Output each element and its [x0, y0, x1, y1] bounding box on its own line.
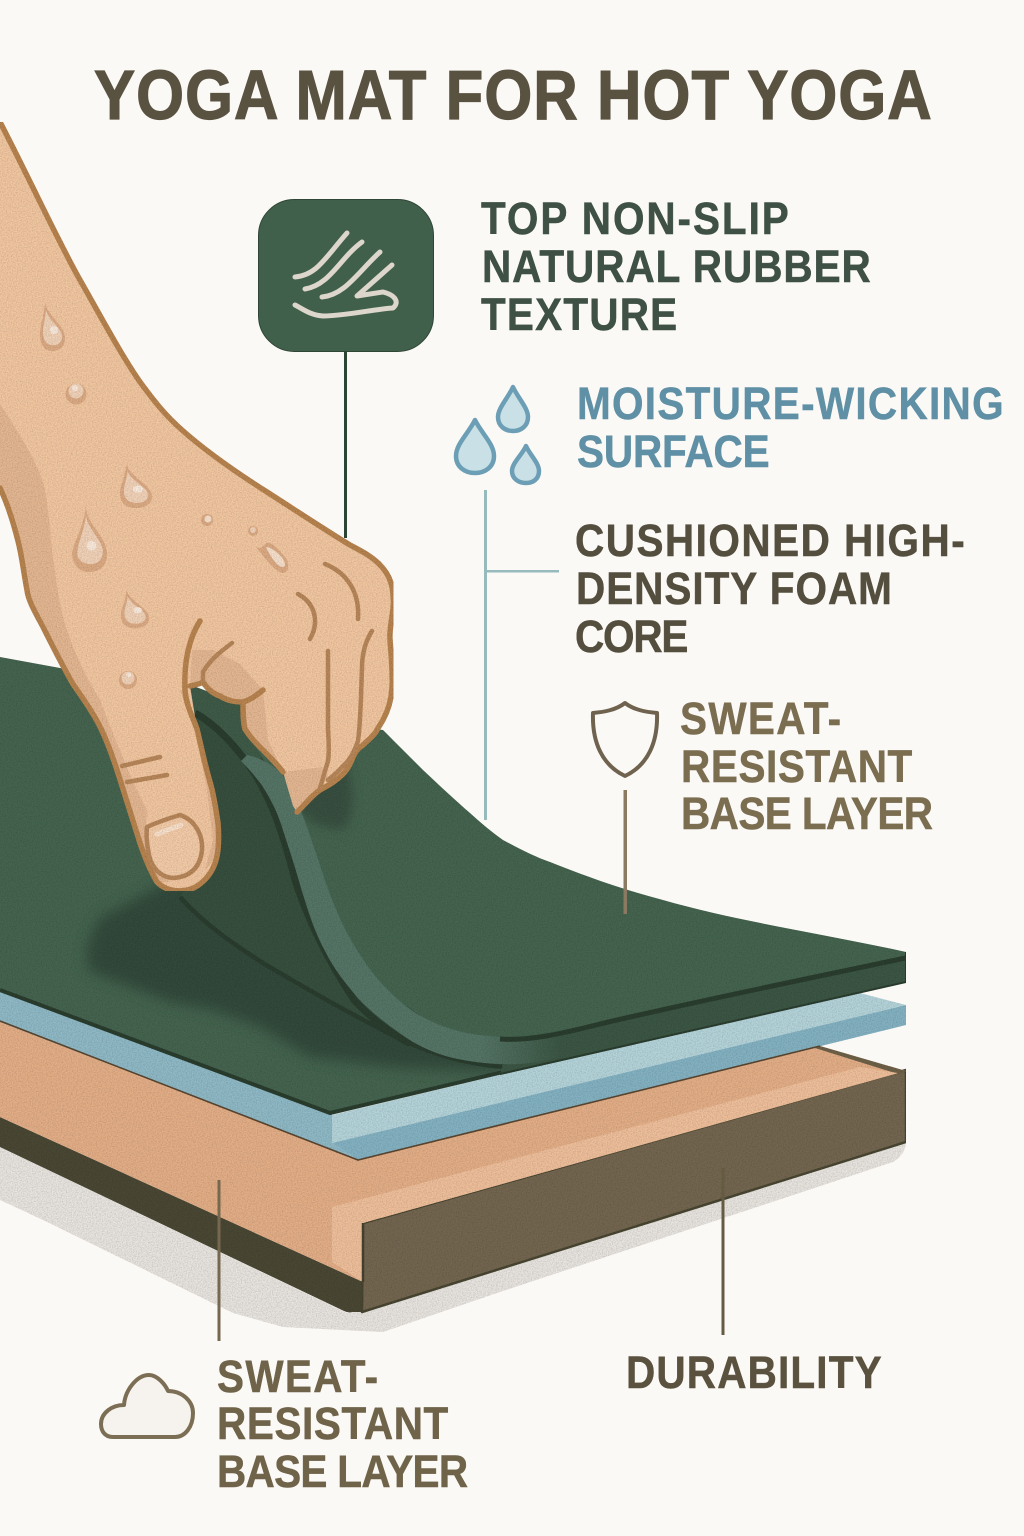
leader line: sweat-resistant right	[624, 790, 627, 914]
lower mat sheet	[0, 657, 520, 1113]
upper sheet lower edge	[500, 982, 906, 1074]
label: sweat-resistant base layer right: BASE LAYER	[681, 789, 933, 840]
hand shading: wrist and thumb side	[0, 404, 170, 882]
hand shading: palm	[283, 767, 328, 812]
hand shading: thumb right side	[180, 690, 218, 870]
wicking layer: right side face	[332, 1005, 906, 1160]
foam layer: back rim	[815, 1046, 906, 1074]
wicking layer: light top face	[332, 993, 906, 1143]
label: sweat-resistant base layer right: RESISTANT	[681, 742, 912, 793]
lower sheet cast shadow	[87, 875, 510, 1072]
hand outline	[0, 122, 393, 891]
label: moisture-wicking	[577, 379, 1004, 478]
upper sheet right edge	[905, 952, 907, 982]
icon: water drops	[456, 387, 539, 483]
leader line: top texture	[344, 351, 347, 538]
base layer: dark left face	[0, 1117, 363, 1312]
sweat drop 9	[254, 543, 288, 573]
label: cushioned foam core	[575, 516, 965, 663]
shadow of hand on upper sheet	[302, 772, 354, 830]
sweat drop 2	[66, 384, 86, 404]
upper mat sheet	[295, 720, 906, 1042]
base front vertical edge	[362, 1223, 364, 1282]
label: sweat-resistant base layer left	[217, 1352, 468, 1498]
sweat drop 6	[119, 671, 137, 689]
label: moisture-wicking: MOISTURE-WICKING	[577, 379, 1004, 430]
curl underside	[180, 688, 503, 1067]
leader line: durability	[722, 1168, 724, 1335]
label: cushioned foam core: CUSHIONED HIGH-	[575, 516, 965, 567]
base layer: brown front face	[362, 1070, 906, 1312]
icon: shield	[593, 703, 657, 776]
finger crease lines	[122, 564, 372, 788]
sweat drop 3	[120, 464, 152, 508]
hand with sweat	[0, 122, 393, 891]
underside fold line	[180, 897, 505, 1067]
label: sweat-resistant base layer left: RESISTANT	[217, 1399, 448, 1450]
mat cross-section illustration	[0, 657, 906, 1332]
hand shading: under fingers	[190, 650, 283, 772]
label: sweat-resistant base layer left: SWEAT-	[217, 1352, 378, 1403]
wicking layer: left face	[0, 985, 358, 1160]
label: sweat-resistant base layer right	[680, 694, 933, 840]
label: top texture: NATURAL RUBBER	[482, 242, 871, 293]
thumbnail	[147, 815, 202, 878]
callout icon: non-slip texture	[258, 200, 434, 352]
label: top texture	[481, 194, 871, 341]
icon: texture strands	[295, 233, 396, 316]
foam layer: tan face	[0, 1015, 906, 1282]
label: sweat-resistant base layer left: BASE LAYER	[217, 1447, 468, 1498]
dark line beside band	[195, 713, 410, 1044]
sweat drop 1	[40, 302, 65, 351]
sweat drop 8	[248, 526, 258, 536]
tan top edge line	[0, 1021, 820, 1160]
hand fill	[0, 122, 393, 891]
upper area between thumb and fingers	[188, 684, 262, 767]
upper sheet side face	[453, 955, 906, 1075]
label: sweat-resistant base layer right: SWEAT-	[680, 694, 841, 745]
icon: cloud	[101, 1375, 193, 1437]
label: durability: DURABILITY	[626, 1348, 882, 1399]
sweat drop 7	[201, 514, 213, 526]
label: cushioned foam core: DENSITY FOAM	[576, 564, 892, 615]
label: top texture: TOP NON-SLIP	[481, 194, 789, 245]
leader line: sweat-resistant left	[218, 1180, 220, 1341]
label: moisture-wicking: SURFACE	[577, 427, 770, 478]
foam layer: light strip	[332, 1067, 898, 1282]
label: cushioned foam core: CORE	[575, 612, 688, 663]
ground shadow	[0, 1143, 906, 1332]
leader lines: wicking and foam	[484, 490, 559, 820]
curled band edge	[241, 755, 560, 1064]
label: top texture: TEXTURE	[481, 290, 677, 341]
sweat drop 4	[72, 504, 107, 572]
title: YOGA MAT FOR HOT YOGA	[94, 55, 932, 134]
upper sheet dark edge line	[500, 958, 906, 1039]
sweat drop 5	[121, 590, 149, 628]
lower sheet front edge	[0, 990, 520, 1113]
thumbnail highlight	[157, 825, 181, 834]
icon tile	[258, 200, 434, 352]
